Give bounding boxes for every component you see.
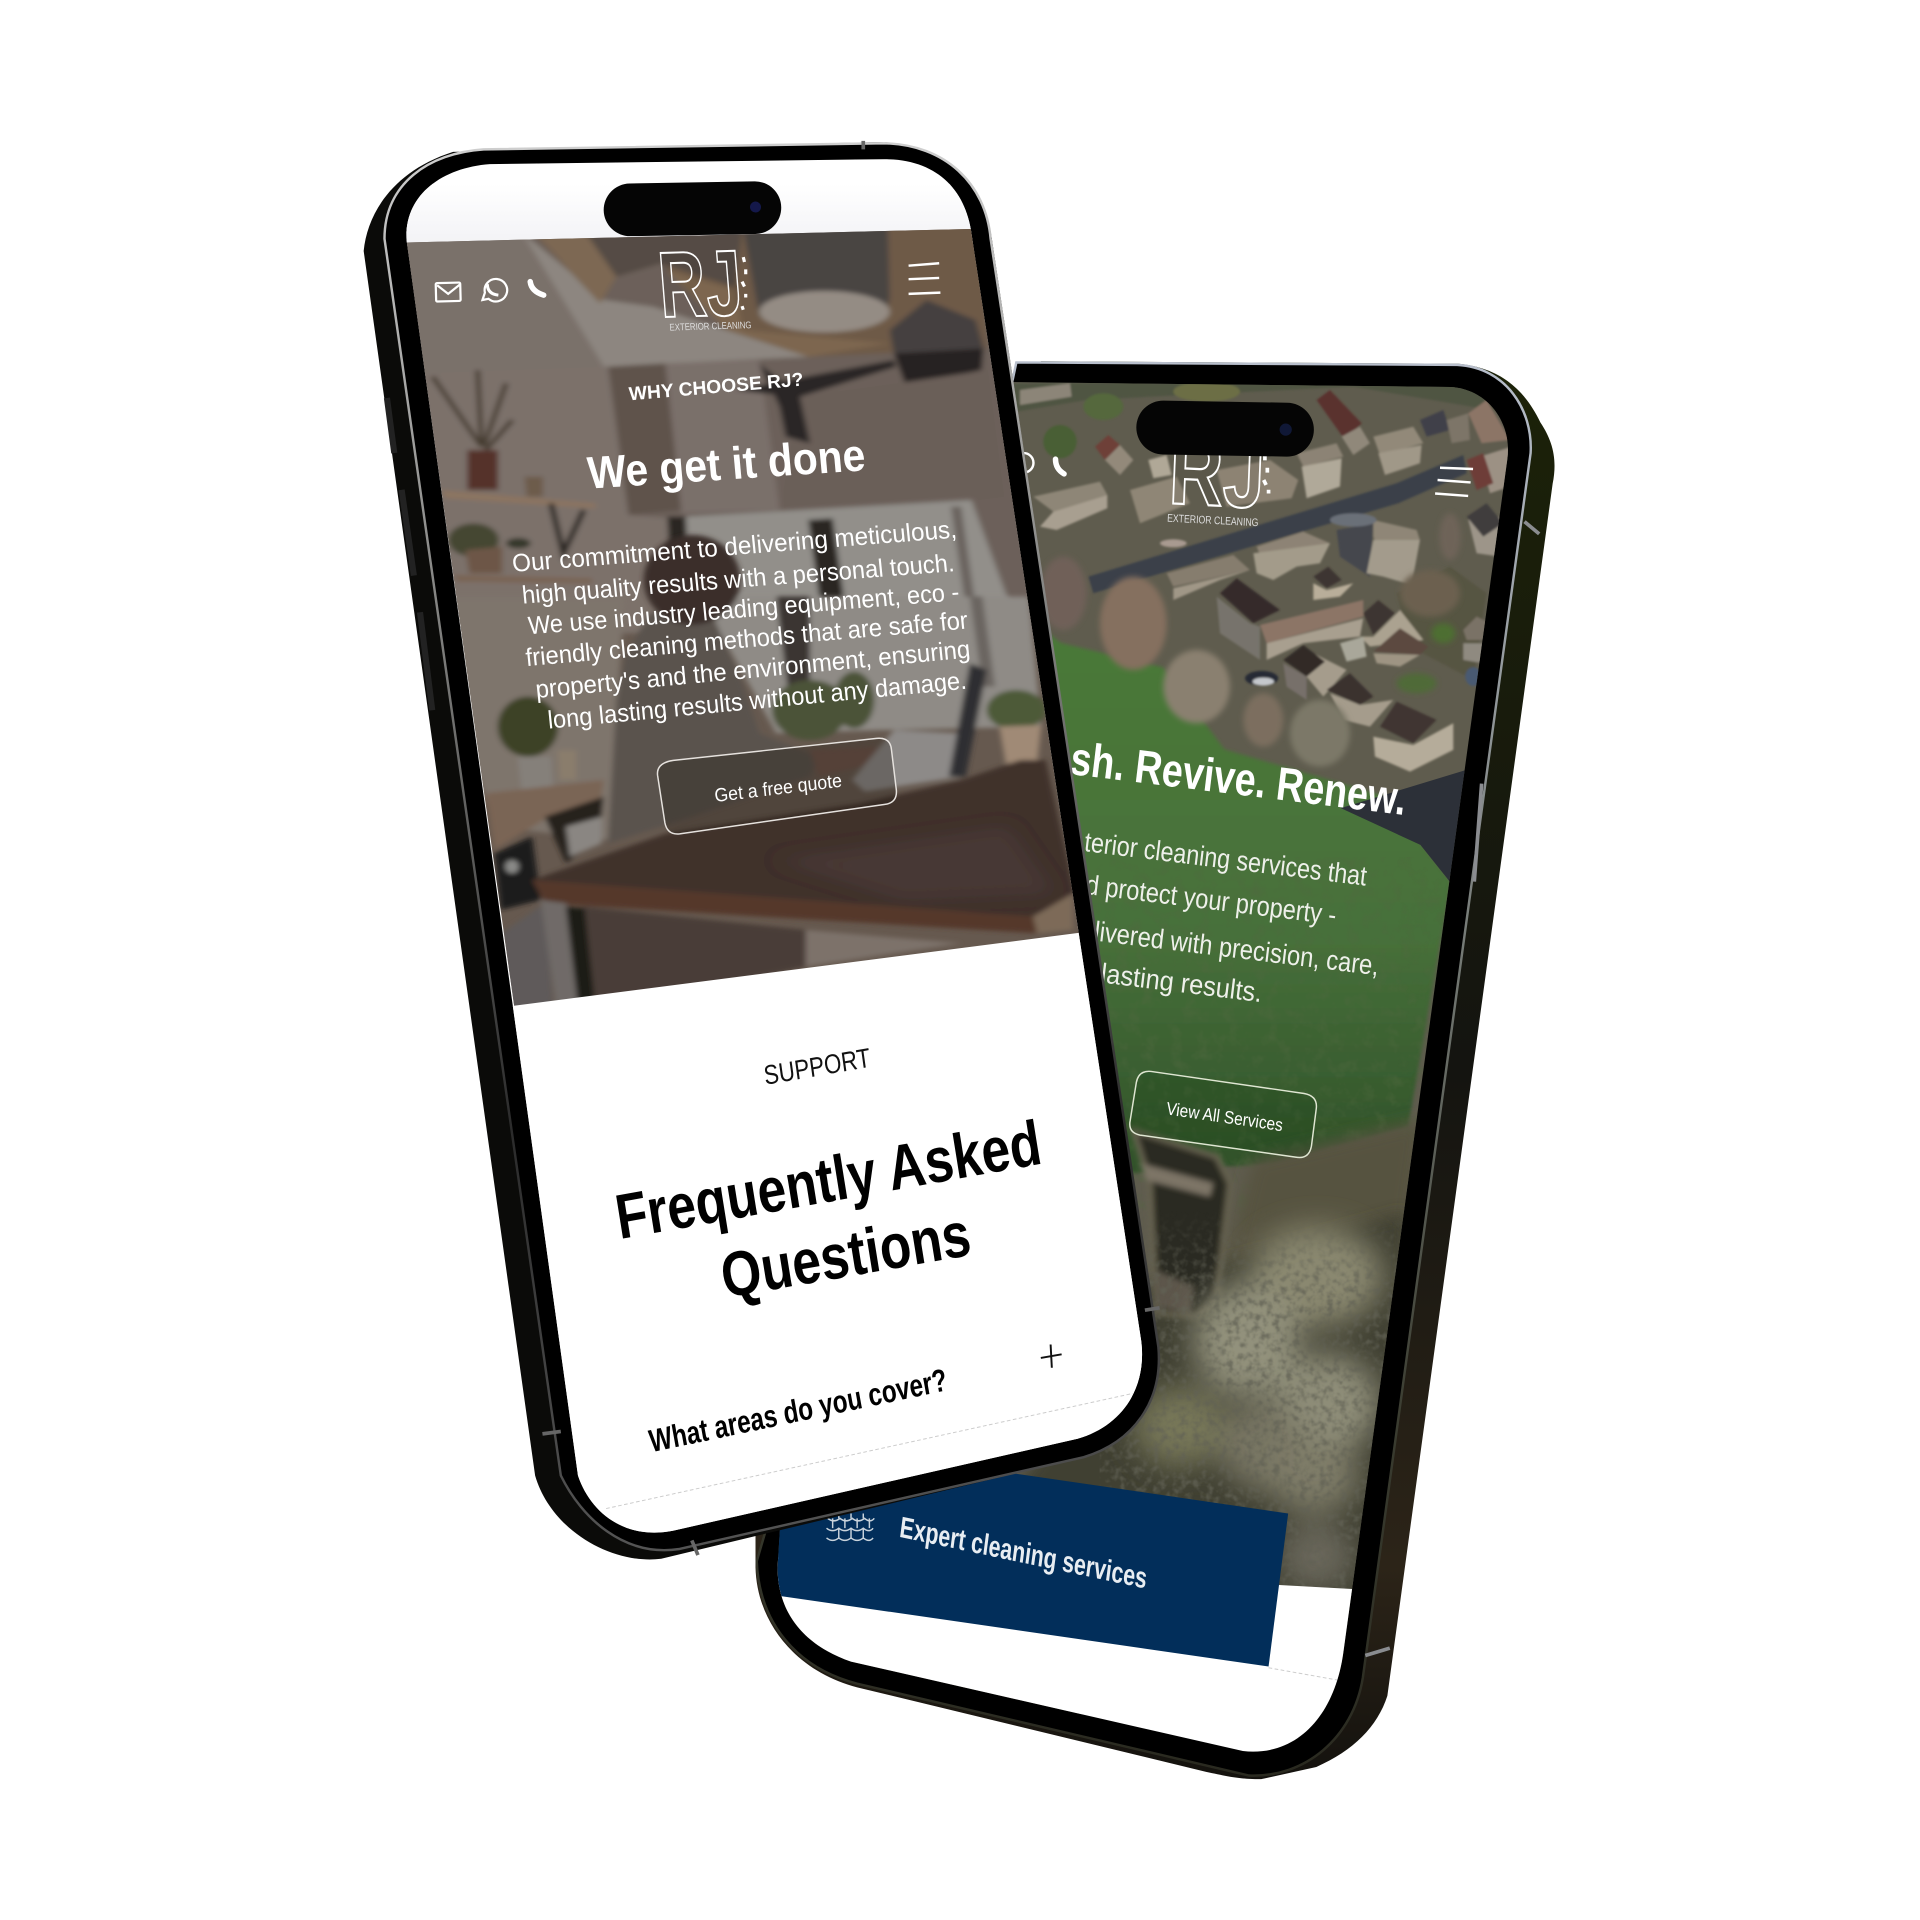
icon: roof tiles xyxy=(827,1513,874,1540)
paragraph: long lasting results without any damage. xyxy=(546,667,968,735)
hamburger menu xyxy=(909,263,940,294)
icon: plus xyxy=(1041,1344,1062,1368)
paragraph xyxy=(511,516,972,735)
street xyxy=(1088,455,1467,593)
front phone screen xyxy=(406,159,1142,1533)
navy banner xyxy=(778,1474,1288,1666)
header: contact icons xyxy=(1014,453,1064,474)
aerial houses, road and trees (street level) xyxy=(1007,380,1512,772)
hero paragraph: terior cleaning services that xyxy=(1083,826,1369,892)
hero paragraph xyxy=(1086,834,1376,1002)
front phone metal body xyxy=(364,142,1160,1559)
illustration: two tilted phones xyxy=(364,140,1555,1780)
front phone antenna bands xyxy=(542,141,1160,1555)
upper kitchen: ceiling, lamps, wall, shelves xyxy=(392,220,1053,633)
header contact icons xyxy=(436,279,544,302)
hamburger menu xyxy=(1435,468,1473,496)
hero paragraph: d protect your property - xyxy=(1084,869,1338,931)
back phone bezel xyxy=(757,362,1531,1776)
paragraph: Our commitment to delivering meticulous, xyxy=(511,516,958,578)
RJ logo: EXTERIOR CLEANING xyxy=(669,320,752,334)
button: get a free quote: Get a free quote xyxy=(714,771,843,807)
side buttons xyxy=(387,398,432,710)
front phone bezel xyxy=(384,143,1159,1550)
front phone camera island xyxy=(603,181,782,237)
back phone side accents xyxy=(1365,522,1539,1656)
back phone metal body xyxy=(756,361,1555,1779)
front phone xyxy=(364,141,1176,1559)
green field xyxy=(1052,635,1450,1175)
label: support: SUPPORT xyxy=(762,1043,872,1091)
FAQ heading: Questions xyxy=(716,1199,975,1312)
icon: mail xyxy=(436,283,461,302)
hero paragraph: livered with precision, care, xyxy=(1093,915,1381,981)
hero paragraph: g-lasting results. xyxy=(1077,955,1264,1008)
button: get a free quote xyxy=(657,738,896,834)
RJ logo xyxy=(660,250,751,331)
banner text: Expert cleaning services xyxy=(898,1511,1149,1596)
RJ logo: RJ xyxy=(655,231,746,337)
back phone screen xyxy=(778,382,1508,1752)
hero heading: sh. Revive. Renew. xyxy=(1068,732,1409,825)
back phone xyxy=(735,361,1592,1779)
lower kitchen: person, laptop, table xyxy=(414,535,1075,1017)
paragraph: friendly cleaning methods that are safe for xyxy=(524,607,969,672)
FAQ heading xyxy=(611,1108,1046,1312)
logo: RJ xyxy=(1167,418,1267,529)
ruins and winter trees (lower photo) xyxy=(1019,1119,1416,1610)
icon: phone xyxy=(530,282,544,295)
white lower section xyxy=(778,1558,1352,1752)
eyebrow: WHY CHOOSE RJ? xyxy=(628,370,804,405)
white FAQ lower cover xyxy=(508,933,1176,1555)
FAQ question: What areas do you cover? xyxy=(646,1362,950,1459)
FAQ heading: Frequently Asked xyxy=(611,1108,1046,1253)
logo xyxy=(1168,454,1270,526)
divider xyxy=(606,1393,1133,1509)
paragraph: property's and the environment, ensuring xyxy=(534,635,972,704)
heading: We get it done xyxy=(585,429,867,499)
icon: whatsapp xyxy=(482,279,507,301)
divider xyxy=(1269,1668,1337,1680)
button: view all services: View All Services xyxy=(1165,1098,1284,1135)
paragraph: We use industry leading equipment, eco - xyxy=(527,578,961,640)
road right of field xyxy=(1341,770,1464,881)
kitchen photo xyxy=(406,229,1079,1006)
button: view all services xyxy=(1130,1071,1316,1158)
paragraph: high quality results with a personal touch. xyxy=(521,549,956,610)
aerial photo background xyxy=(778,382,1508,1714)
logo: EXTERIOR CLEANING xyxy=(1167,513,1259,529)
back phone camera island xyxy=(1136,400,1314,457)
